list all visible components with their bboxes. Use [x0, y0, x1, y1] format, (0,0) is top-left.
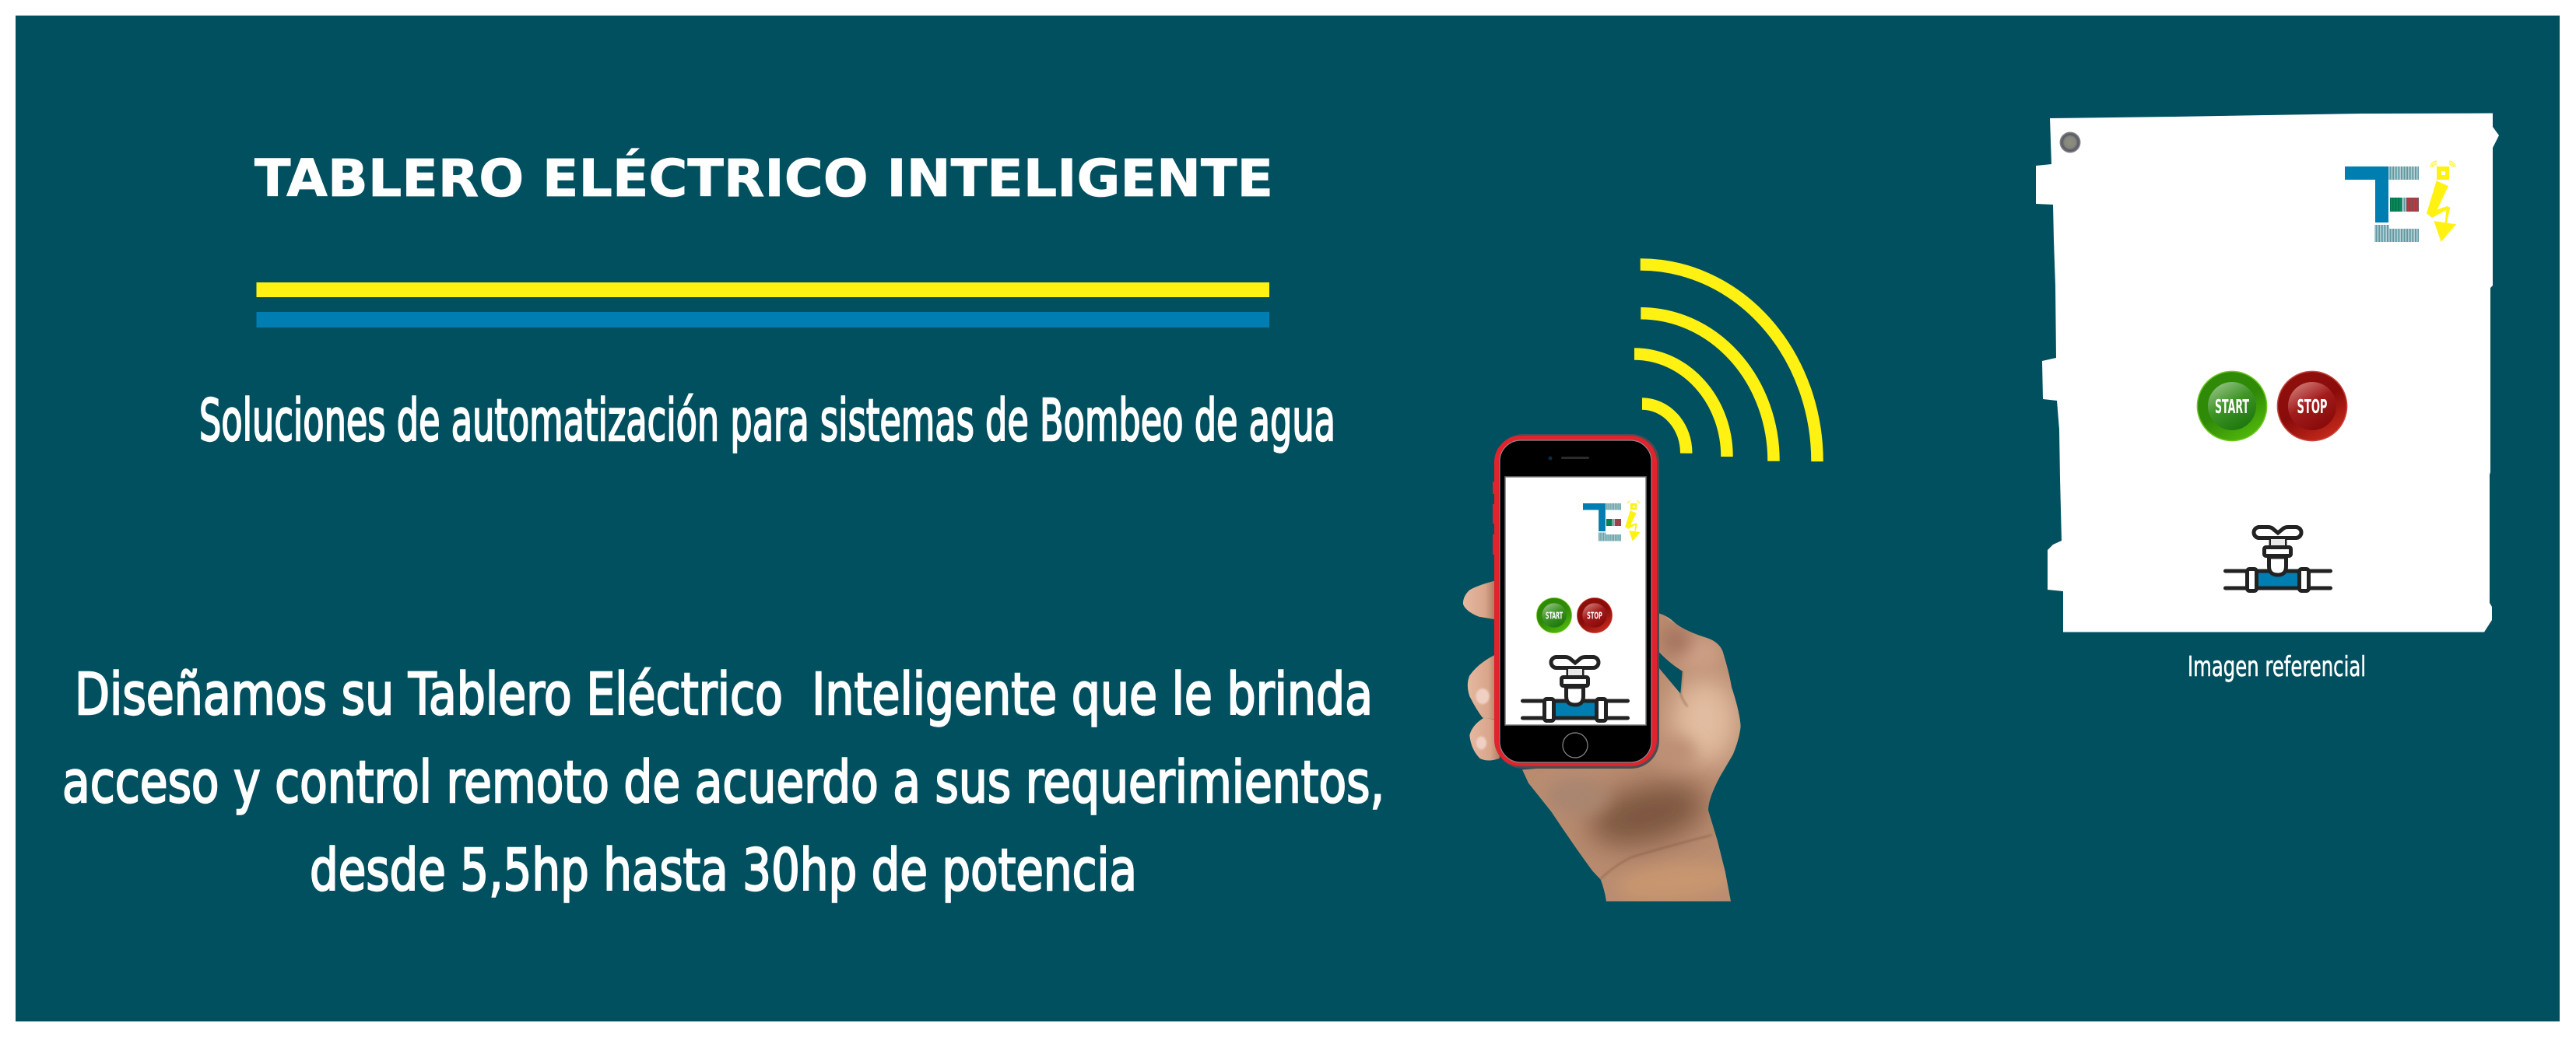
valve icon	[2226, 527, 2330, 591]
ring finger	[1469, 718, 1502, 760]
phone logo	[1583, 501, 1641, 541]
panel logo	[2345, 161, 2456, 242]
stop button	[2277, 371, 2347, 441]
phone side buttons	[1493, 482, 1495, 555]
caption: Imagen referencial	[2188, 651, 2366, 683]
home button	[1563, 733, 1588, 758]
blue title rule	[257, 312, 1269, 328]
phone valve icon	[1522, 657, 1628, 720]
body text: desde 5,5hp hasta 30hp de potencia	[310, 837, 1137, 904]
title: TABLERO ELÉCTRICO INTELIGENTE	[254, 148, 1273, 208]
phone screen	[1505, 477, 1646, 725]
panel body	[2036, 114, 2499, 632]
phone case	[1495, 434, 1659, 769]
palm, thumb and wrist	[1512, 607, 1746, 906]
subtitle: Soluciones de automatización para sistemas de Bombeo de agua	[199, 387, 1335, 454]
phone start button: START	[1546, 610, 1563, 622]
phone stop button: STOP	[1587, 610, 1602, 622]
gap between thumb and palm	[1655, 648, 1683, 694]
body text	[62, 661, 1385, 904]
yellow title rule	[257, 282, 1269, 297]
start button: START	[2215, 395, 2249, 418]
phone	[1493, 434, 1659, 769]
middle finger	[1468, 654, 1500, 720]
camera	[1549, 456, 1552, 461]
body text: Diseñamos su Tablero Eléctrico Inteligente que le brinda	[75, 661, 1373, 728]
phone start button	[1536, 597, 1572, 633]
panel screw	[2059, 132, 2081, 152]
phone stop button	[1577, 597, 1613, 633]
start button	[2197, 371, 2267, 441]
body text: acceso y control remoto de acuerdo a sus requerimientos,	[62, 749, 1385, 816]
electrical panel	[2036, 114, 2499, 632]
stop button: STOP	[2297, 395, 2327, 418]
index finger	[1463, 580, 1497, 620]
icon: wifi signal arcs	[1634, 265, 1817, 461]
hand holding phone	[1463, 580, 1746, 906]
speaker	[1561, 457, 1589, 459]
